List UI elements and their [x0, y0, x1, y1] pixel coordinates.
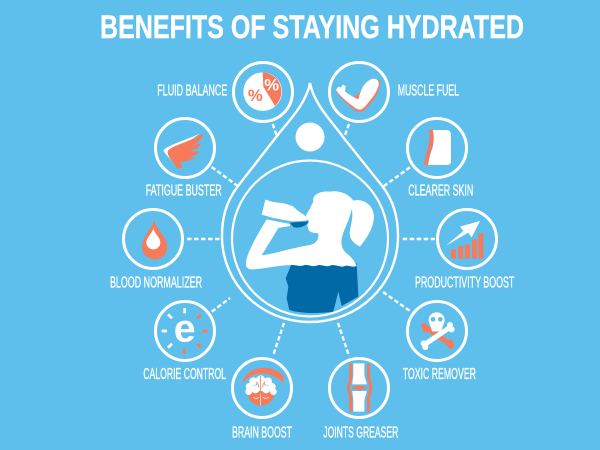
benefit: clearer skin [408, 118, 473, 200]
body silhouette [246, 191, 374, 269]
benefit: calorie control [143, 302, 226, 383]
icon: flexed arm [336, 79, 380, 112]
icon: blood drop [142, 219, 167, 259]
icon: brain with arc [242, 368, 283, 406]
central water drop [222, 83, 398, 322]
icon: skull and crossbones [421, 312, 455, 350]
icon: energy e with rays: e [174, 307, 196, 351]
benefit: fatigue buster [146, 118, 222, 200]
benefit: blood normalizer [110, 210, 202, 291]
label: BRAIN BOOST [232, 425, 292, 442]
benefit: brain boost [232, 358, 292, 442]
label: MUSCLE FUEL [398, 83, 459, 100]
icon: percentage pie: % [264, 76, 279, 95]
icon: rising bars and arrow [446, 221, 483, 259]
woman drinking from bottle [246, 191, 374, 313]
benefit: toxic remover [403, 302, 476, 383]
icon: skin layers [424, 129, 451, 165]
icon: wing [163, 133, 203, 168]
benefit: joints greaser [323, 358, 398, 442]
icon: knee joint [347, 363, 372, 412]
water bottle [262, 200, 309, 228]
blue top [286, 263, 358, 313]
label: FLUID BALANCE [157, 83, 227, 100]
label: PRODUCTIVITY BOOST [415, 274, 514, 291]
benefit: productivity boost [415, 210, 514, 291]
icon: percentage pie [243, 72, 282, 111]
label: TOXIC REMOVER [403, 366, 476, 383]
label: JOINTS GREASER [323, 425, 398, 442]
label: BLOOD NORMALIZER [110, 274, 202, 291]
label: CALORIE CONTROL [143, 366, 226, 383]
label: CLEARER SKIN [408, 183, 473, 200]
icon: percentage pie: % [248, 86, 263, 105]
benefit: muscle fuel [330, 62, 459, 122]
benefit: fluid balance [157, 62, 292, 122]
label: FATIGUE BUSTER [146, 183, 222, 200]
connector lines [187, 124, 435, 356]
